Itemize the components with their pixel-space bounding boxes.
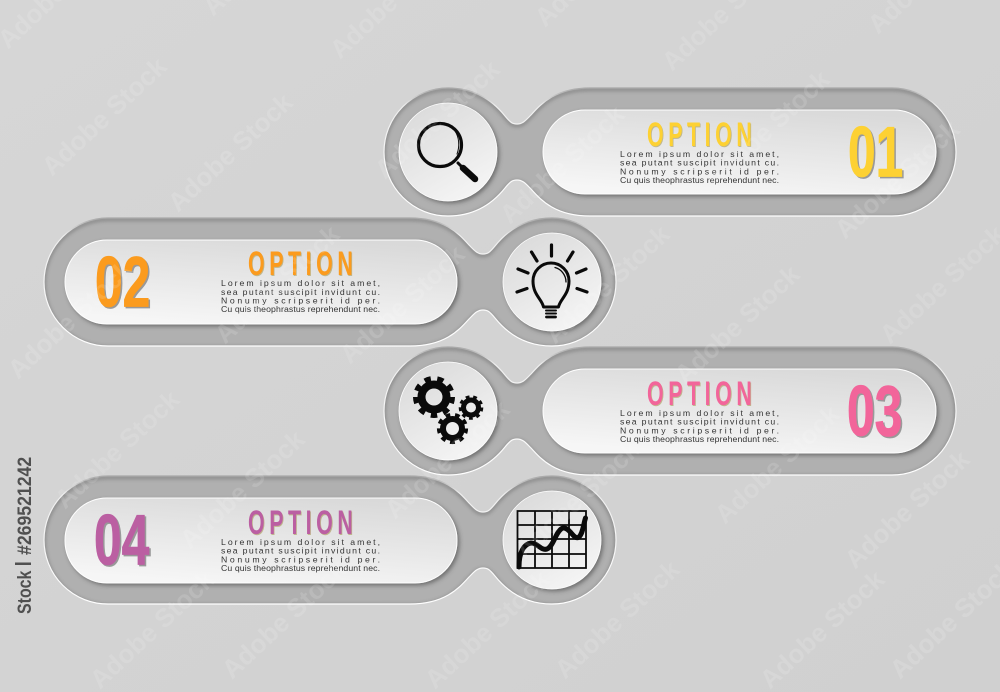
heading 04: OPTION [248,504,353,542]
number 02: 02 [95,243,150,322]
watermarks: repeated stock text: Adobe Stock [509,434,646,564]
panel: option 02 [44,218,616,348]
heading 03: OPTION [647,375,752,413]
heading 02: OPTION [249,246,354,284]
body text 01: Nonumy scripserit id per. [620,166,779,176]
body text 02: Nonumy scripserit id per. [221,296,380,306]
watermarks: repeated stock text: Adobe Stock [369,54,506,184]
number 03: 03 [848,373,904,452]
watermarks: repeated stock text: Adobe Stock [699,64,836,194]
heading 01: OPTION [648,117,753,155]
icon: line chart on grid [518,511,586,568]
icon: gears [416,378,482,442]
watermarks: repeated stock text: Adobe Stock [209,219,346,349]
recessed frame 01 [384,88,956,218]
text pill 03 [543,369,936,453]
panel: option 03 [384,347,956,476]
watermarks: repeated stock text: Adobe Stock [379,394,516,524]
panel: option 04 [44,476,616,606]
watermarks: repeated stock text: Adobe Stock [174,424,311,554]
body text 04 [221,537,380,573]
icon disc 03 [399,362,497,460]
number 01: 01 [850,114,905,193]
watermark: stock image id: #269521242 [13,457,35,555]
body text 04: sea putant suscipit invidunt cu. [221,546,380,556]
watermarks: repeated stock text: Adobe Stock [2,254,139,384]
body text 02: sea putant suscipit invidunt cu. [221,287,380,297]
icon: light bulb [517,245,587,317]
body text 02: Lorem ipsum dolor sit amet, [221,278,380,288]
body text 01: Lorem ipsum dolor sit amet, [620,149,779,159]
heading 02: OPTION [248,245,353,283]
recessed frame 04 [44,476,616,606]
icon: magnifying glass [418,124,475,179]
body text 04: Nonumy scripserit id per. [221,554,380,564]
icon disc 04 [503,491,601,589]
body text 04: Lorem ipsum dolor sit amet, [221,537,380,547]
text pill 01 [543,110,936,194]
watermark: stock image id [13,457,35,614]
body text 03: Lorem ipsum dolor sit amet, [620,408,779,418]
watermarks: repeated stock text: Adobe Stock [216,554,353,684]
body text 03 [620,408,779,444]
watermarks: repeated stock text: Adobe Stock [829,114,966,244]
watermarks: repeated stock text: Adobe Stock [539,219,676,349]
watermark: stock image id: Stock [14,570,35,614]
icon disc 01 [399,103,497,201]
watermarks: repeated stock text: Adobe Stock [494,99,631,229]
body text 02: Cu quis theophrastus reprehendunt nec. [221,304,380,314]
icon disc 02 [503,233,601,331]
body text 03: Nonumy scripserit id per. [620,426,779,436]
recessed frame 03 [384,347,956,476]
text pill 02 [65,240,457,324]
watermarks: repeated stock text: Adobe Stock [549,554,686,684]
heading 03: OPTION [648,376,753,414]
number 04: 04 [94,501,149,580]
watermarks: repeated stock text: Adobe Stock [419,564,556,692]
recessed frame 02 [44,218,616,348]
watermarks: repeated stock text: Adobe Stock [49,384,186,514]
watermarks: repeated stock text: Adobe Stock [754,564,891,692]
number 04: 04 [96,502,151,581]
body text 01: Cu quis theophrastus reprehendunt nec. [620,175,779,185]
body text 03: Cu quis theophrastus reprehendunt nec. [620,434,779,444]
body text 01 [620,149,779,185]
watermarks: repeated stock text: Adobe Stock [669,259,806,389]
number 01: 01 [848,113,903,192]
watermarks: repeated stock text: Adobe Stock [839,444,976,574]
heading 04: OPTION [249,505,354,543]
text pill 04 [65,498,457,583]
body text 03: sea putant suscipit invidunt cu. [620,416,779,426]
number 03: 03 [847,372,902,451]
body text 01: sea putant suscipit invidunt cu. [620,158,779,168]
watermarks: repeated stock text: Adobe Stock [36,51,173,181]
number 02: 02 [96,244,152,323]
panel: option 01 [384,88,956,218]
watermarks: repeated stock text: Adobe Stock [709,399,846,529]
watermarks: repeated stock text: Adobe Stock [162,87,299,217]
body text 02 [221,278,380,314]
watermarks: repeated stock text: Adobe Stock [334,239,471,369]
watermarks: repeated stock text: Adobe Stock [84,564,221,692]
heading 01: OPTION [647,116,752,154]
body text 04: Cu quis theophrastus reprehendunt nec. [221,563,380,573]
